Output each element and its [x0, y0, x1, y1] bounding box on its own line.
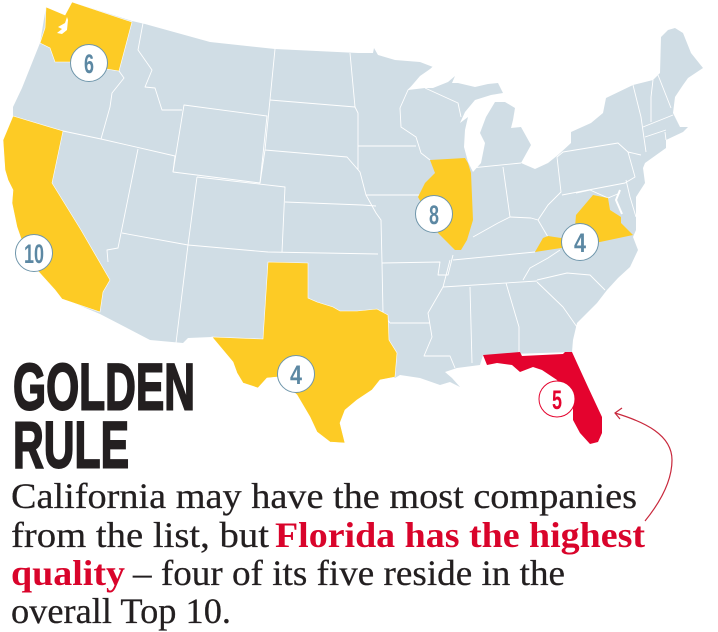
badge: Florida 5	[539, 381, 575, 417]
map of the United States	[3, 2, 703, 444]
body text	[11, 476, 645, 631]
badge: California 10	[16, 234, 52, 272]
badge: Illinois 8	[416, 196, 452, 232]
state: Texas	[212, 262, 397, 443]
badge: California 10: 10	[24, 239, 44, 269]
title	[13, 350, 195, 482]
state: Florida	[483, 352, 602, 444]
arrow: from text to Florida	[615, 408, 672, 521]
body text: – four of its five reside in the	[132, 553, 565, 593]
body text: overall Top 10.	[11, 591, 231, 631]
state: Illinois	[418, 158, 473, 250]
badge: Texas 4	[278, 356, 314, 392]
badge: Virginia 4: 4	[574, 228, 586, 258]
badge: Florida 5: 5	[552, 385, 562, 415]
state: California	[3, 116, 110, 312]
title: RULE	[13, 408, 129, 482]
badge: Illinois 8: 8	[429, 200, 439, 230]
badge: Washington 6: 6	[84, 49, 94, 79]
state: Washington	[40, 2, 132, 71]
land: contiguous states	[3, 2, 703, 387]
body text: California may have the most companies	[11, 476, 637, 516]
Puget Sound	[57, 17, 68, 34]
badge: Texas 4: 4	[290, 360, 302, 390]
badge: Virginia 4	[562, 224, 598, 260]
body text: quality	[11, 553, 125, 593]
state boundaries	[63, 23, 673, 368]
badge: Washington 6	[70, 44, 108, 82]
body text: from the list, but	[11, 515, 269, 555]
body text: Florida has the highest	[275, 515, 645, 555]
title: GOLDEN	[13, 350, 195, 424]
state: Virginia	[535, 195, 633, 252]
